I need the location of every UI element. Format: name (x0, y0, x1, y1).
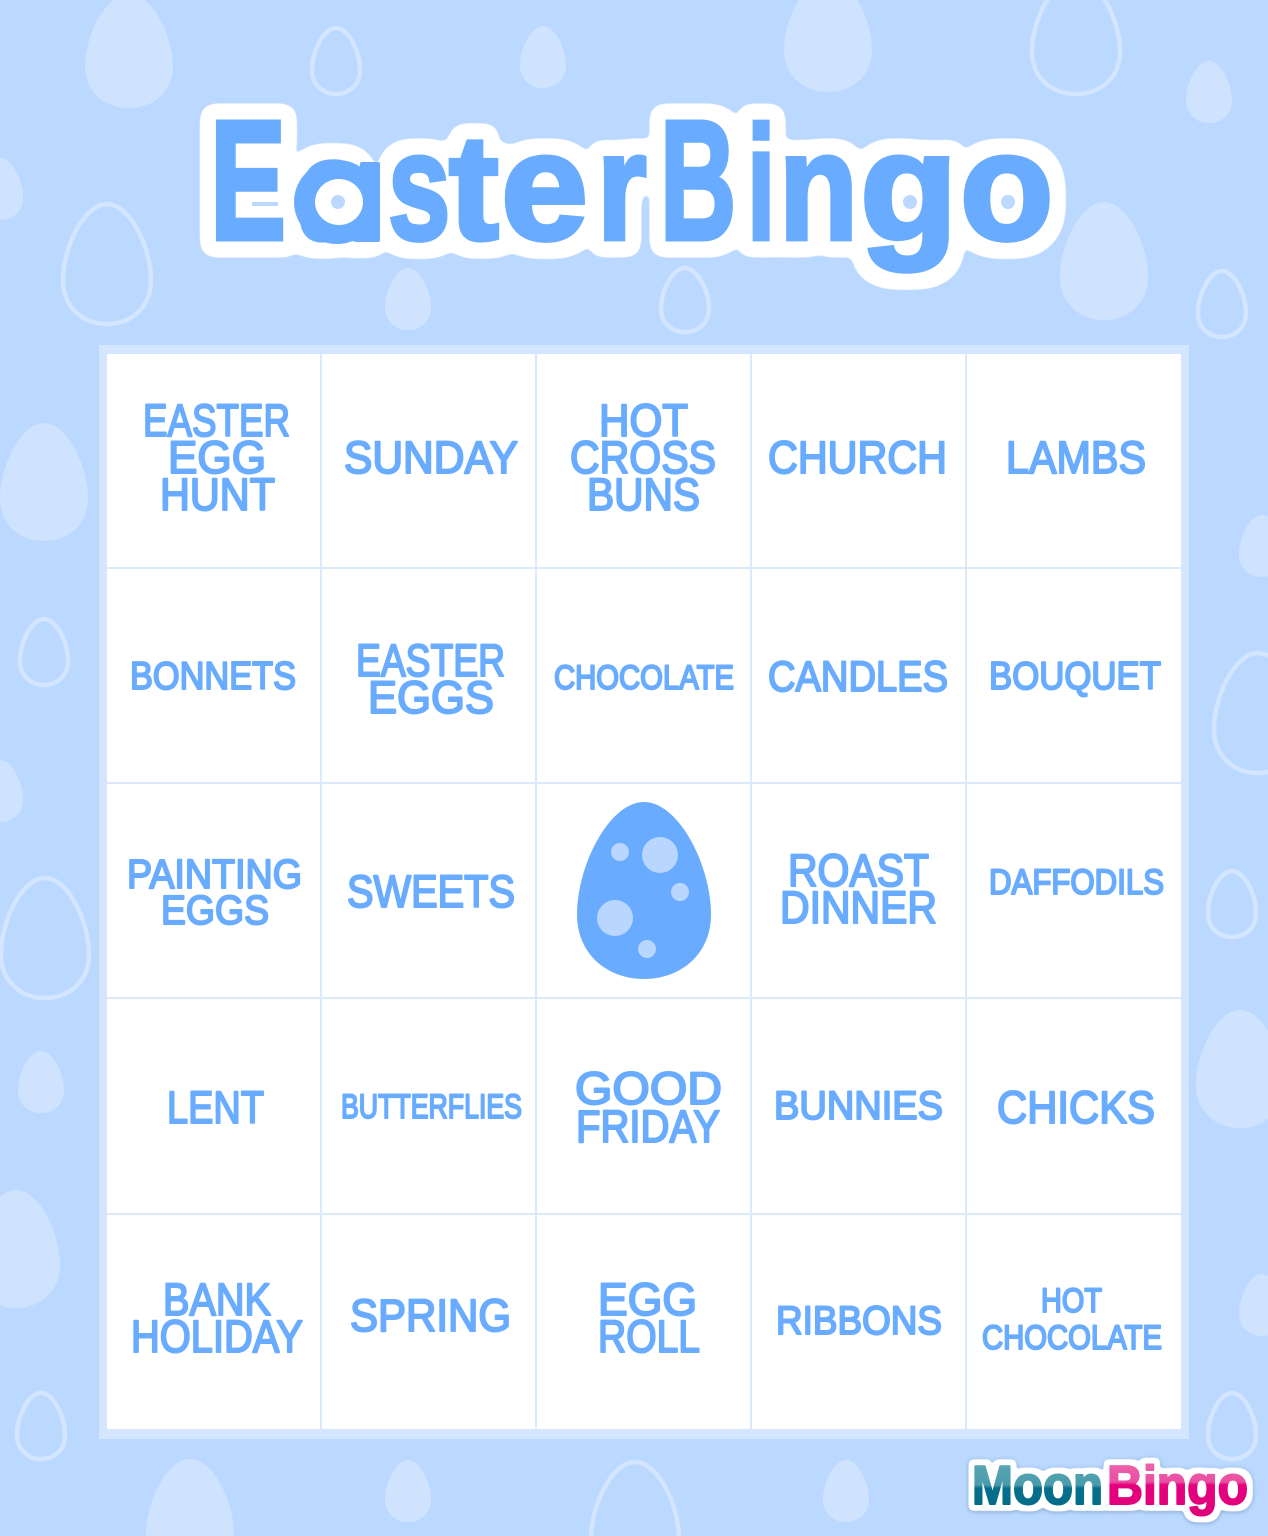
cell: Roast dinner (780, 845, 937, 933)
cell: Sweets: SWEETS (347, 866, 515, 917)
cell: Hot chocolate (982, 1282, 1162, 1357)
cell: Ribbons: RIBBONS (776, 1299, 942, 1343)
cell: Bank holiday: HOLIDAY (131, 1311, 303, 1362)
cell: Sunday: SUNDAY (344, 432, 518, 483)
cell: Butterflies: BUTTERFLIES (341, 1088, 522, 1126)
cell: Daffodils: DAFFODILS (989, 863, 1164, 902)
icon: spotted egg free space (577, 802, 711, 979)
title: s (388, 101, 450, 272)
title: g (860, 101, 958, 272)
title: t (449, 104, 499, 272)
cell: Egg roll: ROLL (598, 1311, 700, 1362)
cell: Painting eggs: PAINTING (127, 851, 302, 897)
cell: Good Friday (575, 1063, 722, 1152)
title: i (747, 94, 775, 274)
cell: Hot cross buns (570, 395, 716, 520)
cell: Bunnies: BUNNIES (774, 1084, 943, 1128)
cell: Hot chocolate: HOT (1041, 1282, 1102, 1320)
cell: Lent: LENT (167, 1082, 264, 1133)
title: a (298, 109, 369, 271)
cell: Bouquet: BOUQUET (989, 655, 1161, 698)
cell: Easter eggs (356, 635, 505, 723)
cell: Egg roll (598, 1274, 700, 1362)
cell: Easter eggs: EASTER (356, 635, 505, 686)
cell: Roast dinner: DINNER (780, 882, 937, 933)
cell: Bank holiday (131, 1274, 303, 1362)
logo: MoonBingo: Moon (972, 1454, 1103, 1516)
title: n (779, 101, 858, 272)
title: B (660, 86, 736, 276)
logo: MoonBingo: Bingo (1107, 1454, 1248, 1516)
board frame (99, 345, 1189, 1439)
cell: Easter egg hunt: EASTER (143, 395, 290, 446)
title: r (597, 101, 647, 272)
cell: Easter egg hunt: HUNT (160, 469, 275, 520)
cell: Good Friday: GOOD (575, 1063, 722, 1114)
cell: Easter egg hunt: EGG (168, 432, 266, 483)
title (200, 86, 1066, 290)
cell: Spring: SPRING (350, 1290, 511, 1341)
cell: Easter eggs: EGGS (368, 672, 494, 723)
cell: Church: CHURCH (768, 432, 947, 483)
title: E (210, 86, 286, 276)
board sheet (107, 354, 1181, 1429)
cell: Candles: CANDLES (768, 653, 948, 701)
cell: Bonnets: BONNETS (130, 655, 296, 698)
cell: Lambs: LAMBS (1006, 432, 1146, 483)
logo: MoonBingo (966, 1454, 1255, 1526)
cell: Hot cross buns: HOT (599, 395, 688, 446)
cell: Painting eggs: EGGS (161, 887, 269, 933)
cell: Painting eggs (127, 851, 302, 933)
cell: Roast dinner: ROAST (788, 845, 929, 896)
cell: Hot chocolate: CHOCOLATE (982, 1319, 1162, 1357)
cell: Chicks: CHICKS (997, 1082, 1155, 1133)
cell: Easter egg hunt (143, 395, 290, 520)
cell: Egg roll: EGG (598, 1274, 697, 1325)
cell: Chocolate: CHOCOLATE (554, 659, 734, 697)
title: o (960, 101, 1053, 272)
cell: Hot cross buns: CROSS (570, 432, 716, 483)
cell: Hot cross buns: BUNS (587, 469, 700, 520)
cell: Good Friday: FRIDAY (576, 1101, 720, 1152)
title: e (501, 101, 588, 272)
cell: Bank holiday: BANK (163, 1274, 271, 1325)
